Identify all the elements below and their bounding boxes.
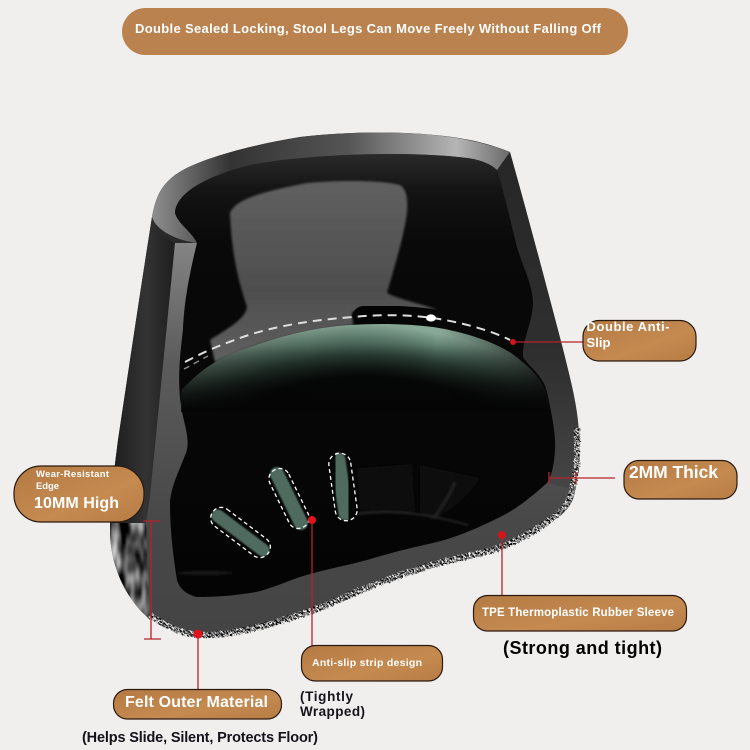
ribs at base of cavity (357, 464, 480, 525)
white spot on ring (426, 314, 436, 322)
anti-slip strip left (207, 503, 274, 562)
label pill: Anti-slip strip design (312, 657, 422, 669)
label pill: TPE Thermoplastic Rubber Sleeve (482, 607, 674, 619)
label pill: Slip (586, 335, 611, 350)
label pill (14, 466, 144, 522)
leader line (510, 339, 584, 345)
left outer side wall (110, 217, 175, 525)
label pill (624, 460, 737, 499)
measure line (143, 521, 161, 639)
label pill (114, 690, 282, 719)
callout: 2MM thick (549, 460, 737, 499)
gray reflection (210, 181, 437, 362)
inner lit wall (146, 243, 575, 637)
label pill: Wear-Resistant (36, 469, 110, 480)
label pill (302, 646, 442, 681)
measure line (549, 472, 615, 484)
callout: anti-slip strip design (302, 516, 442, 681)
label pill (474, 596, 686, 631)
callout: wear-resistant edge (14, 466, 161, 639)
green inner base highlight (181, 324, 548, 412)
anti-slip strip right (327, 452, 359, 522)
outer sleeve body (110, 132, 579, 637)
green downward fade into black (181, 324, 548, 412)
label pill: Felt Outer Material (125, 694, 268, 711)
title banner: Double Sealed Locking, Stool Legs Can Move Freely Without Falling Off (135, 21, 602, 36)
callout: TPE sleeve (474, 531, 686, 631)
note: strong and tight: (Strong and tight) (503, 638, 662, 658)
product: rubber sleeve cross-section (110, 132, 579, 637)
label pill: Double Anti- (586, 319, 670, 334)
note: tightly wrapped (300, 689, 365, 719)
top rim (152, 132, 510, 243)
leader line (308, 516, 316, 646)
label pill: 2MM Thick (629, 462, 718, 482)
label pill (583, 319, 696, 361)
anti-slip strip middle (266, 465, 312, 532)
title banner (122, 8, 628, 55)
felt patch on left side (110, 523, 150, 620)
green edge shading (181, 324, 548, 412)
callout: felt outer material (114, 630, 282, 719)
dashed double anti-slip ring (185, 315, 510, 362)
felt edge texture (150, 428, 577, 635)
label pill: 10MM High (34, 495, 119, 512)
callout: double anti-slip (510, 319, 696, 361)
note: helps slide: (Helps Slide, Silent, Protects Floor) (82, 730, 318, 746)
leader line (194, 630, 202, 690)
second dashed ring fragment (184, 356, 208, 369)
note: tightly wrapped: Wrapped) (300, 704, 365, 719)
leader line (498, 531, 506, 596)
faint streak low in cavity (177, 570, 233, 576)
note: tightly wrapped: (Tightly (300, 689, 353, 704)
inner cavity (170, 154, 555, 597)
label pill: Edge (36, 481, 59, 492)
black band at sealing ring (352, 306, 437, 327)
